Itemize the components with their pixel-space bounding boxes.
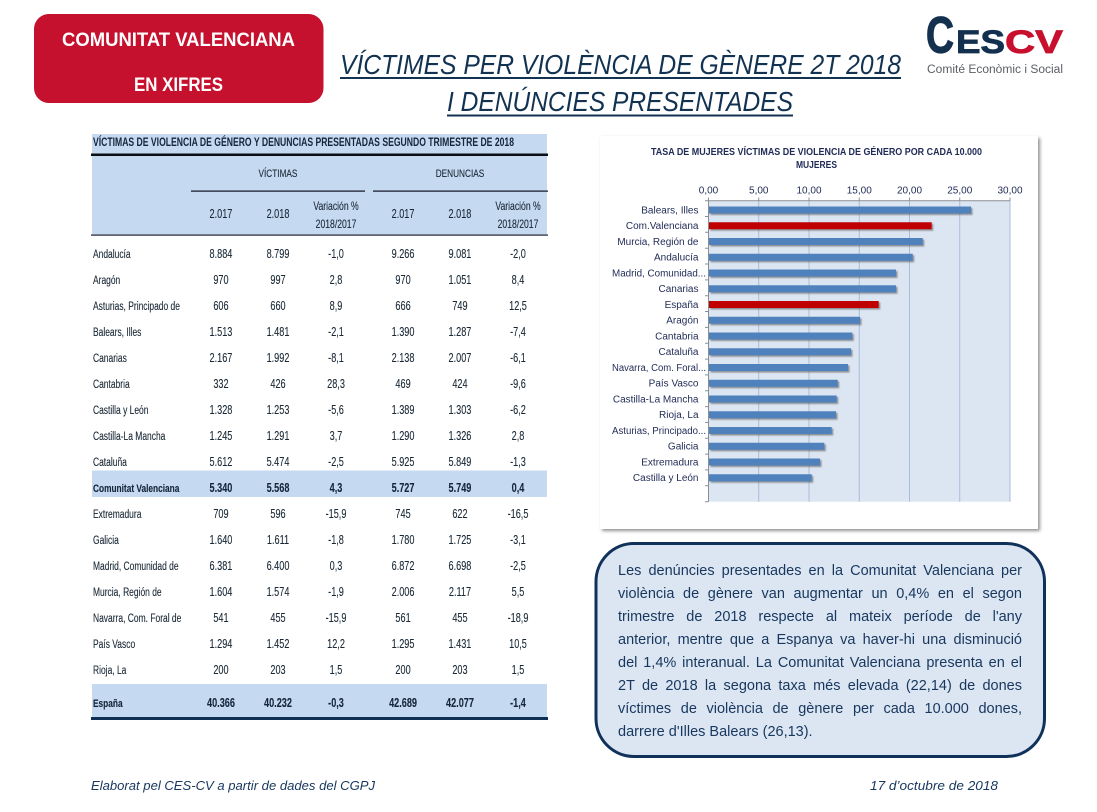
y axis labels: Murcia, Región de: [617, 237, 699, 248]
text block: summary paragraph: darrere d'Illes Balears (26,13).: [618, 724, 813, 740]
row: Canarias: 2.007: [449, 352, 471, 365]
row: Aragón: 8,4: [512, 274, 524, 287]
table: víctimas y denuncias: [91, 134, 548, 720]
row: Aragón: 970: [395, 274, 411, 287]
table title band: VÍCTIMAS DE VIOLENCIA DE GÉNERO Y DENUNCIAS PRESENTADAS SEGUNDO TRIMESTRE DE 2018: [93, 134, 514, 149]
row: Murcia: Murcia, Región de: [93, 587, 162, 599]
row: Rioja: 1,5: [330, 664, 342, 677]
logo: CESCV: C: [926, 6, 954, 64]
row: Navarra: Navarra, Com. Foral de: [93, 613, 182, 625]
row: Cantabria: -9,6: [510, 378, 526, 391]
row: Comunitat Valenciana: 4,3: [330, 482, 342, 495]
row: Navarra: 455: [270, 612, 286, 625]
row: Cataluña: 5.612: [210, 456, 232, 469]
text block: summary paragraph: anterior, mentre que a Espanya va haver-hi una disminució: [618, 632, 1022, 648]
row: Rioja: [93, 664, 524, 677]
row: España: 40.366: [207, 697, 235, 710]
row: País Vasco: 1.295: [392, 638, 414, 651]
table header: 2018/2017: [498, 219, 539, 231]
row: Rioja: 200: [395, 664, 411, 677]
row: Balears: [93, 326, 526, 339]
row: Canarias: -6,1: [510, 352, 526, 365]
text block: summary paragraph: trimestre de 2018 respecte al mateix període de l'any: [618, 609, 1022, 625]
row: Galicia: 1.611: [267, 534, 289, 547]
row: País Vasco: 10,5: [509, 638, 527, 651]
row: Asturias: 12,5: [509, 300, 527, 313]
row: Castilla-La Mancha: 2,8: [512, 430, 524, 443]
y axis labels: Rioja, La: [659, 410, 699, 421]
row: Madrid: -2,5: [510, 560, 526, 573]
row: País Vasco: 1.294: [210, 638, 232, 651]
row: Castilla y León: -6,2: [510, 404, 526, 417]
y axis labels: [612, 206, 706, 484]
text block: summary paragraph: 2T de 2018 la segona taxa més elevada (22,14) de dones: [618, 678, 1022, 694]
row: Aragón: 997: [270, 274, 286, 287]
y axis labels: Canarias: [658, 284, 698, 295]
row: Aragón: [93, 274, 524, 287]
x axis labels: 5,00: [749, 186, 769, 196]
row: Cataluña: [93, 456, 526, 469]
y axis labels: Andalucía: [654, 253, 699, 264]
row: Cantabria: 332: [213, 378, 229, 391]
x axis labels: 0,00: [699, 186, 719, 196]
row: Balears: 1.481: [267, 326, 289, 339]
row: Navarra: 455: [452, 612, 468, 625]
row: Canarias: 1.992: [267, 352, 289, 365]
y axis labels: Extremadura: [641, 458, 699, 468]
x axis labels: 30,00: [997, 186, 1023, 196]
row: Asturias: 8,9: [330, 300, 342, 313]
row: País Vasco: 12,2: [327, 638, 345, 651]
y axis labels: Castilla-La Mancha: [613, 394, 699, 406]
x axis labels: 20,00: [897, 186, 922, 196]
row: Aragón: 2,8: [330, 274, 342, 287]
y axis labels: Navarra, Com. Foral...: [612, 363, 706, 374]
row: Cataluña: -1,3: [510, 456, 526, 469]
row: Galicia: Galicia: [93, 535, 119, 547]
row: Cantabria: 424: [452, 378, 468, 391]
row: Asturias: 749: [452, 300, 468, 313]
row: Cataluña: Cataluña: [93, 457, 127, 469]
y axis labels: Madrid, Comunidad...: [612, 268, 706, 280]
row: Castilla-La Mancha: 1.245: [210, 430, 232, 443]
chart title: MUJERES: [796, 160, 837, 171]
row: Castilla-La Mancha: 1.291: [267, 430, 289, 443]
row: Andalucía: 8.799: [267, 248, 289, 261]
row: Castilla-La Mancha: [93, 430, 524, 443]
row: Andalucía: 8.884: [210, 248, 232, 261]
logo: CESCV: CV: [1005, 24, 1064, 60]
bars: [709, 206, 971, 481]
row: Andalucía: [93, 248, 526, 261]
table header: Variación %: [313, 201, 359, 213]
badge: Comunitat Valenciana en xifres: [34, 14, 324, 103]
row: Madrid: 6.872: [392, 560, 414, 573]
y axis labels: Aragón: [666, 316, 698, 327]
row: Balears: 1.287: [449, 326, 471, 339]
row: Comunitat Valenciana: Comunitat Valenciana: [93, 483, 180, 495]
row: España: 42.689: [389, 697, 417, 710]
row: Murcia: 2.006: [392, 586, 414, 599]
row: Navarra: -15,9: [326, 612, 346, 625]
row: Canarias: -8,1: [328, 352, 344, 365]
y axis labels: Castilla y León: [633, 473, 698, 484]
row: Castilla-La Mancha: 3,7: [330, 430, 342, 443]
row: Castilla y León: 1.253: [267, 404, 289, 417]
row: Asturias: Asturias, Principado de: [93, 301, 180, 313]
row: Cantabria: 28,3: [327, 378, 345, 391]
row: Rioja: 203: [452, 664, 468, 677]
row: Andalucía: Andalucía: [93, 249, 131, 261]
badge: Comunitat Valenciana en xifres: EN XIFRES: [134, 74, 223, 96]
row: Comunitat Valenciana: 0,4: [512, 482, 525, 495]
row: Galicia: [93, 534, 526, 547]
table header: DENUNCIAS: [436, 168, 485, 180]
row: Madrid: 6.400: [267, 560, 289, 573]
row: Extremadura: -15,9: [326, 508, 346, 521]
text block: summary paragraph: del 1,4% interanual. La Comunitat Valenciana presenta en el: [618, 655, 1022, 671]
row: Castilla y León: 1.328: [210, 404, 232, 417]
y axis labels: Balears, Illes: [641, 206, 698, 216]
logo: CESCV: Comité Econòmic i Social: [927, 64, 1063, 76]
row: Castilla y León: 1.389: [392, 404, 414, 417]
row: Rioja: 203: [270, 664, 286, 677]
title: VÍCTIMES PER VIOLÈNCIA DE GÈNERE 2T 2018: [340, 49, 901, 80]
row: Balears: 1.390: [392, 326, 414, 339]
row: Comunitat Valenciana: 5.340: [210, 482, 232, 495]
row: Extremadura: 745: [395, 508, 411, 521]
logo: CESCV: [926, 6, 1064, 76]
panel: bar chart: [600, 136, 1038, 529]
row: Cataluña: 5.474: [267, 456, 289, 469]
table header: 2.017: [392, 208, 414, 221]
row: Rioja: 1,5: [512, 664, 524, 677]
row: Aragón: Aragón: [93, 275, 120, 287]
row: Comunitat Valenciana: 5.727: [392, 482, 414, 495]
row: Murcia: 5,5: [512, 586, 524, 599]
y axis labels: España: [665, 300, 699, 311]
y axis labels: Cataluña: [658, 347, 699, 358]
row: Extremadura: 709: [213, 508, 229, 521]
row: España: España: [93, 698, 123, 710]
x axis labels: [699, 186, 1023, 196]
row: Extremadura: -16,5: [508, 508, 528, 521]
row: País Vasco: 1.452: [267, 638, 289, 651]
row: España: -1,4: [510, 697, 527, 710]
row: Cantabria: 469: [395, 378, 411, 391]
row: Galicia: 1.640: [210, 534, 232, 547]
row: País Vasco: País Vasco: [93, 639, 135, 651]
row: Canarias: Canarias: [93, 353, 127, 365]
row: Murcia: [93, 586, 524, 599]
row: Canarias: 2.138: [392, 352, 414, 365]
row: Madrid: 0,3: [330, 560, 342, 573]
row: Aragón: 970: [213, 274, 229, 287]
text block: summary paragraph: violència de gènere van augmentar un 0,4% en el segon: [618, 586, 1022, 602]
highlighted bands: [91, 470, 548, 720]
row: Cantabria: [93, 378, 526, 391]
chart title: TASA DE MUJERES VÍCTIMAS DE VIOLENCIA DE GÉNERO POR CADA 10.000: [651, 145, 982, 158]
row: Comunitat Valenciana: 5.568: [267, 482, 289, 495]
row: Castilla y León: Castilla y León: [93, 405, 148, 417]
footer: date: 17 d’octubre de 2018: [870, 778, 999, 793]
row: Cantabria: Cantabria: [93, 379, 130, 391]
text block: summary paragraph: víctimes de violència de gènere per cada 10.000 dones,: [618, 701, 1022, 717]
row: Asturias: 660: [270, 300, 286, 313]
row: Cataluña: 5.925: [392, 456, 414, 469]
row: Murcia: 1.574: [267, 586, 289, 599]
row: Rioja: Rioja, La: [93, 665, 127, 677]
chart title: [651, 145, 982, 171]
row: Andalucía: -1,0: [328, 248, 344, 261]
row: Extremadura: 596: [270, 508, 286, 521]
table header: 2.018: [267, 208, 289, 221]
row: Navarra: [93, 612, 528, 625]
table header: 2018/2017: [316, 219, 357, 231]
row: Navarra: 561: [395, 612, 411, 625]
row: Navarra: -18,9: [508, 612, 528, 625]
logo: CESCV: ES: [956, 24, 1005, 60]
y axis labels: País Vasco: [649, 379, 699, 390]
row: Cataluña: 5.849: [449, 456, 471, 469]
row: Murcia: 2.117: [449, 586, 471, 599]
row: Comunitat Valenciana: [93, 482, 525, 495]
row: Andalucía: 9.266: [392, 248, 414, 261]
table header: Variación %: [495, 201, 541, 213]
row: Madrid: 6.381: [210, 560, 232, 573]
row: Galicia: -1,8: [328, 534, 344, 547]
table header: 2.017: [210, 208, 232, 221]
title: I DENÚNCIES PRESENTADES: [447, 86, 793, 117]
row: País Vasco: 1.431: [449, 638, 471, 651]
x axis labels: 15,00: [847, 186, 872, 196]
table header: 2.018: [449, 208, 471, 221]
row: Madrid: 6.698: [449, 560, 471, 573]
plot area: [705, 198, 1010, 502]
row: Canarias: [93, 352, 526, 365]
row: Cataluña: -2,5: [328, 456, 344, 469]
table header: [91, 154, 548, 236]
row: España: 40.232: [264, 697, 292, 710]
row: España: -0,3: [328, 697, 344, 710]
row: Galicia: 1.725: [449, 534, 471, 547]
row: Castilla-La Mancha: Castilla-La Mancha: [93, 431, 166, 443]
row: Balears: 1.513: [210, 326, 232, 339]
row: Cantabria: 426: [270, 378, 286, 391]
row: Extremadura: 622: [452, 508, 468, 521]
y axis labels: Galicia: [668, 442, 699, 453]
row: Murcia: 1.604: [210, 586, 232, 599]
row: Andalucía: -2,0: [510, 248, 526, 261]
row: Madrid: Madrid, Comunidad de: [93, 561, 179, 573]
row: País Vasco: [93, 638, 527, 651]
row: Galicia: 1.780: [392, 534, 414, 547]
row: España: 42.077: [446, 697, 474, 710]
row: Balears: -7,4: [510, 326, 526, 339]
row: Canarias: 2.167: [210, 352, 232, 365]
row: Murcia: -1,9: [328, 586, 344, 599]
text block: summary paragraph: [618, 563, 1022, 740]
table header: VÍCTIMAS: [259, 168, 298, 180]
row: Castilla-La Mancha: 1.326: [449, 430, 471, 443]
row: Galicia: -3,1: [510, 534, 526, 547]
y axis labels: Com.Valenciana: [626, 221, 699, 232]
table title band: [92, 134, 547, 154]
row: Castilla-La Mancha: 1.290: [392, 430, 414, 443]
row: Castilla y León: [93, 404, 526, 417]
row: Extremadura: Extremadura: [93, 509, 142, 521]
row: Rioja: 200: [213, 664, 229, 677]
x axis labels: 25,00: [947, 186, 973, 196]
footer: source: Elaborat pel CES-CV a partir de dades del CGPJ: [91, 778, 375, 793]
row: Castilla y León: -5,6: [328, 404, 344, 417]
row: Balears: -2,1: [328, 326, 344, 339]
text block: summary paragraph: Les denúncies presentades en la Comunitat Valenciana per: [618, 563, 1022, 579]
row: Asturias: 666: [395, 300, 411, 313]
x axis labels: 10,00: [796, 186, 822, 196]
row: España: [93, 697, 527, 710]
row: Asturias: [93, 300, 527, 313]
row: Madrid: [93, 560, 526, 573]
row: Balears: Balears, Illes: [93, 327, 141, 339]
row: Castilla y León: 1.303: [449, 404, 471, 417]
title: [340, 49, 901, 117]
row: Andalucía: 9.081: [449, 248, 471, 261]
row: Navarra: 541: [213, 612, 229, 625]
row: Extremadura: [93, 508, 528, 521]
row: Asturias: 606: [213, 300, 229, 313]
y axis labels: Asturias, Principado...: [612, 426, 706, 437]
row: Aragón: 1.051: [449, 274, 471, 287]
row: Comunitat Valenciana: 5.749: [449, 482, 471, 495]
panel: text box background: [596, 544, 1044, 756]
y axis labels: Cantabria: [655, 332, 699, 342]
badge: Comunitat Valenciana en xifres: COMUNITAT VALENCIANA: [62, 29, 295, 51]
